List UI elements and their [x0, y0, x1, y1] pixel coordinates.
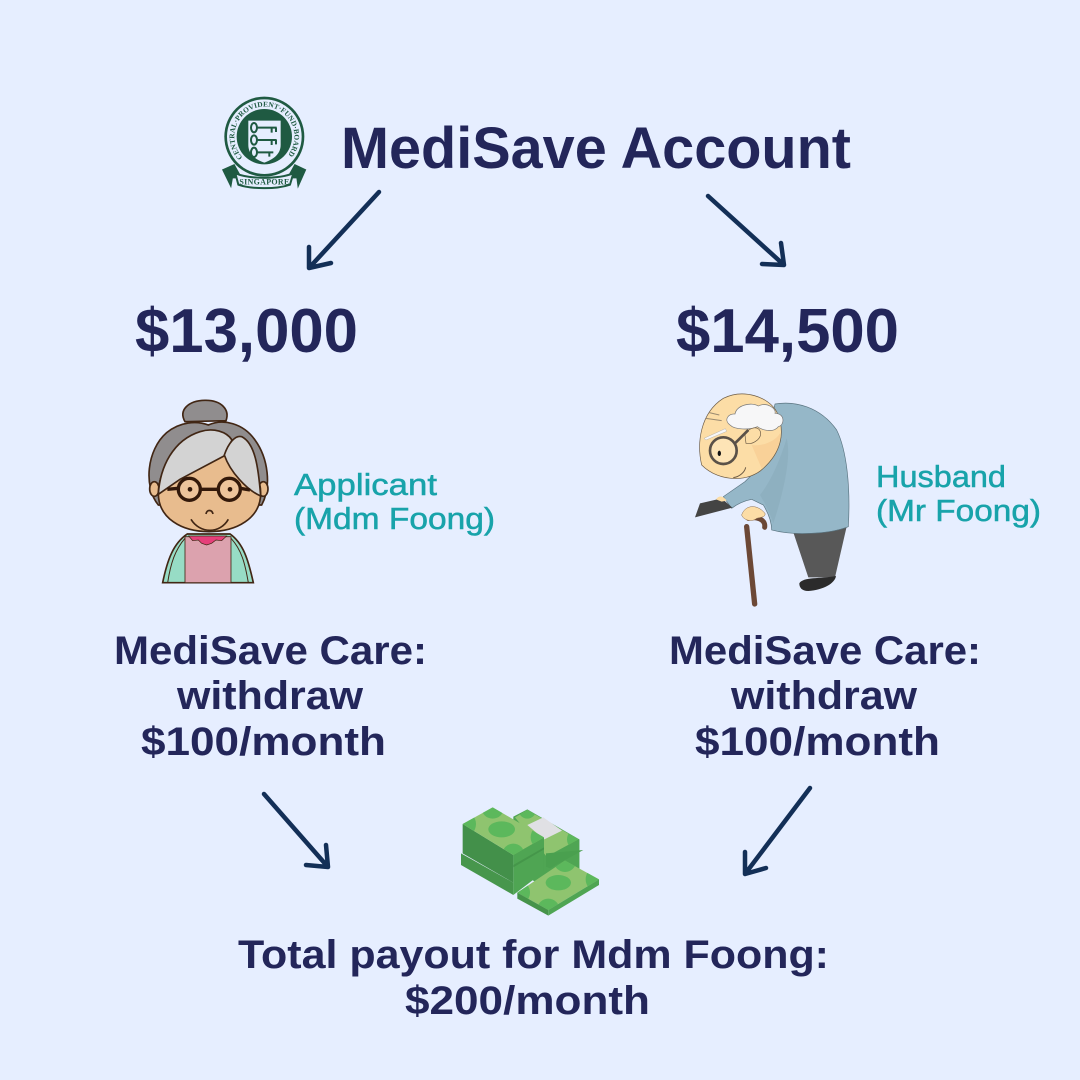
applicant label [294, 467, 495, 536]
applicant label: Applicant [294, 467, 437, 502]
icon: CPF logo [222, 96, 306, 190]
husband label: (Mr Foong) [876, 493, 1041, 528]
applicant balance: $13,000 [135, 297, 358, 366]
arrow: to husband balance [708, 196, 784, 265]
icon: CPF logo: SINGAPORE [239, 177, 289, 186]
total payout text: $200/month [405, 979, 650, 1023]
arrow: to applicant balance [309, 192, 379, 268]
husband withdrawal text: MediSave Care: [669, 629, 981, 673]
applicant withdrawal text: withdraw [176, 674, 364, 718]
applicant withdrawal text: $100/month [141, 720, 386, 764]
total payout text [238, 933, 829, 1023]
title: MediSave Account [341, 116, 851, 181]
total payout text: Total payout for Mdm Foong: [238, 933, 829, 977]
husband label: Husband [876, 459, 1006, 494]
husband label [876, 459, 1041, 528]
icon: money stacks [461, 807, 599, 916]
icon: grandfather [695, 394, 849, 604]
applicant withdrawal text [114, 629, 427, 764]
applicant label: (Mdm Foong) [294, 501, 495, 536]
arrow: applicant withdrawal to payout [264, 794, 328, 867]
icon: CPF logo: CENTRAL·PROVIDENT·FUND·BOARD [229, 102, 300, 160]
icon: grandmother [149, 400, 268, 583]
husband withdrawal text: $100/month [695, 720, 940, 764]
husband withdrawal text: withdraw [730, 674, 918, 718]
applicant withdrawal text: MediSave Care: [114, 629, 427, 673]
husband balance: $14,500 [676, 297, 899, 366]
husband withdrawal text [669, 629, 981, 764]
arrow: husband withdrawal to payout [745, 788, 810, 874]
